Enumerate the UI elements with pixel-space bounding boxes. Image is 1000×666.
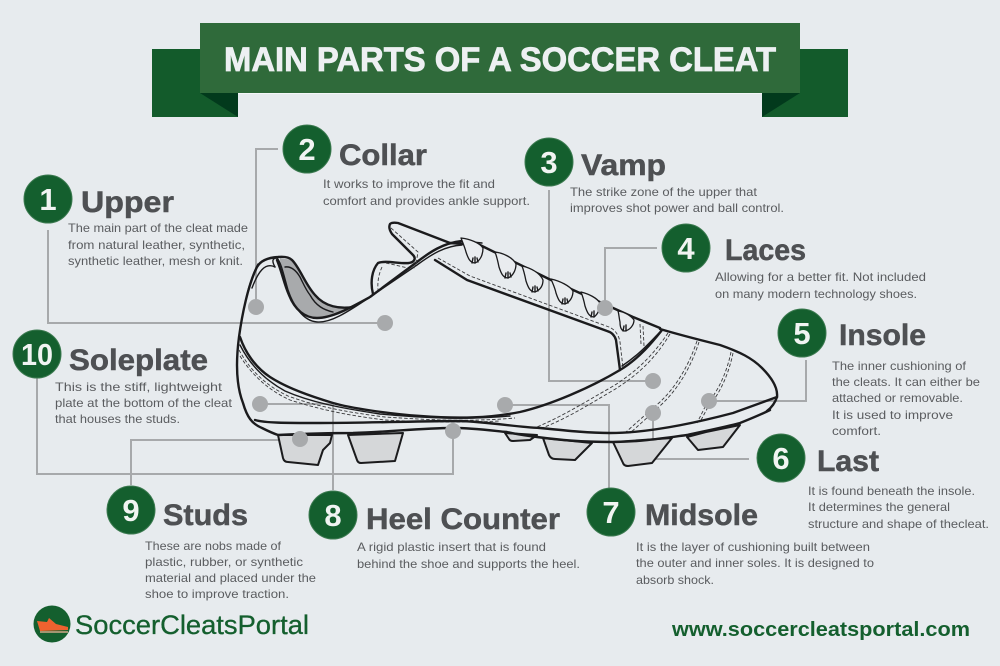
website url: www.soccercleatsportal.com [671, 619, 970, 641]
callout 8: heel counter: A rigid plastic insert that is found [357, 540, 546, 554]
laces [461, 238, 634, 331]
callout 1: upper: synthetic leather, mesh or knit. [68, 254, 243, 268]
callout 1: upper: Upper [81, 186, 174, 219]
callout 5: insole: It is used to improve [832, 408, 953, 422]
callout 4: laces: Laces [725, 234, 806, 267]
callout 2: collar: comfort and provides ankle support. [323, 194, 530, 208]
callout 4: laces: Allowing for a better fit. Not included [715, 270, 926, 284]
callout 5: insole: 5 [793, 316, 811, 351]
callout 4: laces: 4 [677, 231, 695, 266]
callout 3: vamp: The strike zone of the upper that [570, 185, 758, 199]
sole lines [255, 397, 777, 433]
callout 6: last [757, 434, 989, 531]
heel and collar outline [237, 257, 353, 435]
callout 9: studs: plastic, rubber, or synthetic [145, 555, 303, 569]
callout 7: midsole: It is the layer of cushioning built between [636, 540, 870, 554]
callout 1: upper: The main part of the cleat made [68, 221, 248, 235]
callout 6: last: It determines the general [808, 500, 950, 514]
soccer cleat illustration [237, 223, 777, 466]
collar band [273, 245, 462, 322]
lace line [450, 243, 660, 328]
callout 5: insole: comfort. [832, 424, 881, 438]
callout 9: studs [107, 486, 316, 601]
callout 2: collar: Collar [339, 139, 427, 172]
callout 9: studs: These are nobs made of [145, 539, 282, 553]
callout 10: soleplate: 10 [21, 337, 53, 372]
callout 10: soleplate: Soleplate [69, 344, 208, 377]
callout 5: insole: The inner cushioning of [832, 359, 967, 373]
callout 9: studs: 9 [122, 493, 140, 528]
callout 8: heel counter: Heel Counter [366, 503, 560, 536]
callout 10: soleplate: This is the stiff, lightweight [55, 380, 223, 394]
callout 7: midsole: absorb shock. [636, 573, 714, 587]
callout 5: insole: attached or removable. [832, 391, 963, 405]
callout 5: insole [778, 309, 980, 438]
callout 5: insole: Insole [839, 319, 926, 352]
callout 7: midsole: 7 [602, 495, 620, 530]
callout 3: vamp [525, 138, 784, 215]
logo: SoccerCleatsPortal [34, 606, 309, 642]
callout 2: collar: 2 [298, 132, 316, 167]
callout 1: upper: 1 [39, 182, 57, 217]
callout 8: heel counter: 8 [324, 498, 342, 533]
callout 4: laces [662, 224, 926, 301]
logo: SoccerCleatsPortal: SoccerCleatsPortal [75, 610, 309, 640]
callout 6: last: It is found beneath the insole. [808, 484, 975, 498]
studs [278, 425, 740, 466]
leader lines [37, 149, 806, 490]
callout 8: heel counter: behind the shoe and supports the heel. [357, 557, 580, 571]
callout 1: upper: from natural leather, synthetic, [68, 238, 245, 252]
callout 9: studs: shoe to improve traction. [145, 587, 289, 601]
vamp stitching [537, 333, 668, 427]
connector dots [248, 299, 717, 447]
title banner [152, 23, 848, 117]
callout 1: upper [24, 175, 248, 268]
callout 4: laces: on many modern technology shoes. [715, 287, 917, 301]
callout 8: heel counter [309, 491, 580, 571]
collar lining [280, 258, 353, 318]
callout 7: midsole: Midsole [645, 499, 758, 532]
callout 10: soleplate: plate at the bottom of the cleat [55, 396, 233, 410]
toe and vamp [660, 329, 777, 411]
title: MAIN PARTS OF A SOCCER CLEAT [224, 41, 776, 79]
callout 7: midsole [587, 488, 874, 587]
callout 5: insole: the cleats. It can either be [832, 375, 980, 389]
upper seam to toe [435, 260, 620, 370]
callout 2: collar: It works to improve the fit and [323, 177, 495, 191]
tongue [372, 223, 450, 294]
callout 6: last: 6 [772, 441, 790, 476]
callout 9: studs: Studs [163, 499, 248, 532]
callout 10: soleplate [13, 330, 233, 426]
callout 2: collar [283, 125, 530, 208]
callout 3: vamp: improves shot power and ball control. [570, 201, 784, 215]
callout 6: last: Last [817, 445, 879, 478]
callout 7: midsole: the outer and inner soles. It is designed to [636, 556, 874, 570]
callout 3: vamp: Vamp [581, 149, 666, 182]
callout 6: last: structure and shape of thecleat. [808, 517, 989, 531]
callout 10: soleplate: that houses the studs. [55, 412, 180, 426]
callout 3: vamp: 3 [540, 145, 558, 180]
callout 9: studs: material and placed under the [145, 571, 316, 585]
